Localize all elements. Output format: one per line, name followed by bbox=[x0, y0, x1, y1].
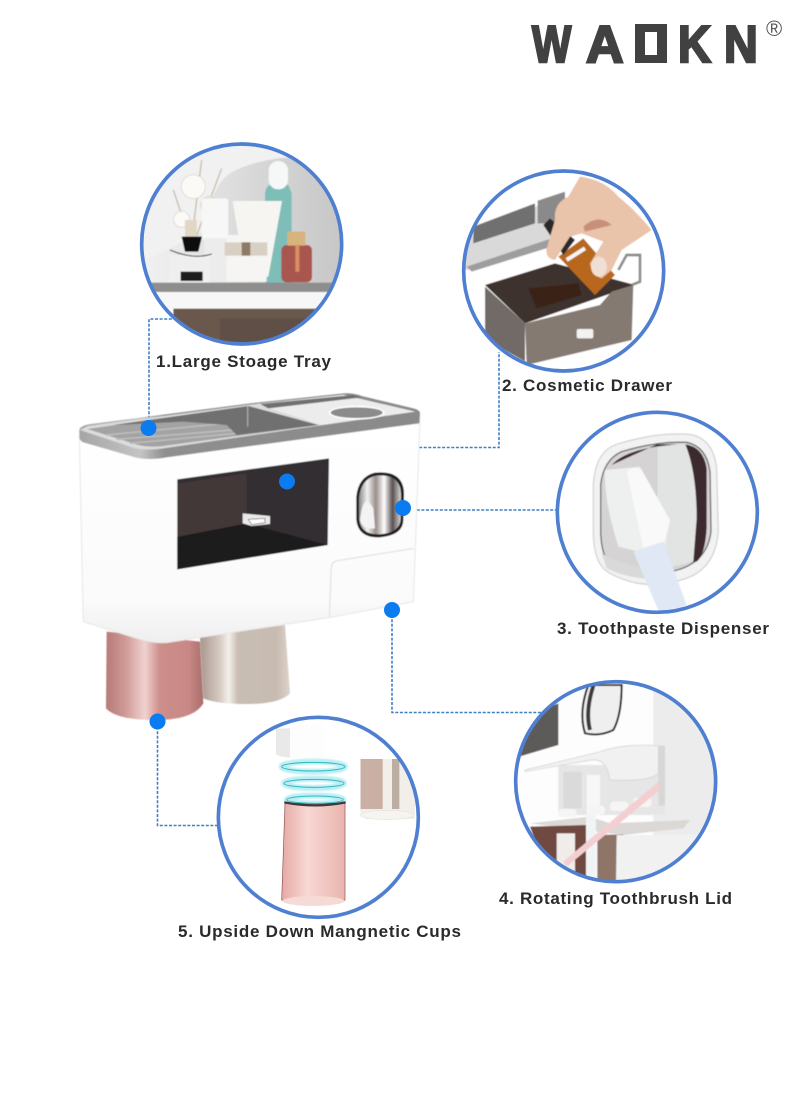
logo: WAOKN: O bbox=[638, 20, 662, 71]
cream tube bbox=[233, 201, 282, 277]
brush holder pegs bbox=[558, 798, 652, 814]
pink cup bbox=[282, 803, 345, 903]
drawer window bbox=[177, 458, 329, 569]
label 5: 5. Upside Down Mangnetic Cups bbox=[178, 922, 461, 941]
dot markers bbox=[140, 420, 411, 730]
panel: magnetic cups circle bbox=[217, 717, 423, 923]
dispenser body bbox=[79, 420, 420, 643]
tray dark rear bbox=[113, 406, 318, 435]
dark interior bbox=[612, 444, 707, 565]
logo: WAOKN bbox=[532, 15, 782, 74]
label 1: 1.Large Stoage Tray bbox=[156, 352, 332, 371]
cream jar bbox=[227, 235, 267, 282]
pink brush bbox=[563, 782, 660, 867]
panel: large storage tray circle bbox=[140, 143, 347, 350]
right top face bbox=[257, 395, 415, 425]
logo: WAOKN: W bbox=[532, 15, 572, 73]
shelf bbox=[140, 283, 347, 292]
panel: rotating toothbrush lid circle bbox=[513, 680, 720, 887]
drawer interior bbox=[485, 263, 635, 323]
rose gold cup bbox=[106, 632, 203, 720]
mirror bbox=[582, 685, 622, 734]
magnetic rings bbox=[282, 762, 345, 804]
logo: WAOKN: A bbox=[586, 16, 624, 74]
drawer sides bbox=[485, 287, 525, 362]
lid bbox=[525, 745, 658, 780]
hand bbox=[546, 177, 652, 278]
drawer clip bbox=[243, 513, 270, 526]
toothpaste squeezer bbox=[356, 472, 404, 537]
cup hole bbox=[329, 406, 385, 420]
label 3: 3. Toothpaste Dispenser bbox=[557, 619, 769, 638]
lower door bbox=[329, 548, 413, 617]
holder bbox=[276, 728, 290, 758]
amber bottle bbox=[558, 238, 615, 295]
chrome frame bbox=[593, 434, 718, 584]
lower tray bbox=[602, 554, 644, 578]
logo: WAOKN: K bbox=[678, 16, 711, 74]
champagne cup bbox=[200, 625, 290, 704]
main product: wall-mounted dispenser bbox=[79, 393, 420, 720]
panel: cosmetic drawer circle bbox=[462, 170, 668, 377]
diffuser sticks bbox=[173, 160, 222, 240]
storage tray bbox=[87, 406, 318, 447]
stored bottle bbox=[528, 283, 582, 308]
top rail bbox=[79, 393, 420, 459]
diffuser jar bbox=[190, 256, 204, 282]
logo: WAOKN: N bbox=[724, 16, 758, 74]
white bottle bbox=[202, 198, 228, 240]
serum bottle bbox=[281, 245, 312, 282]
connector lines bbox=[149, 319, 556, 826]
diffuser flowers bbox=[174, 175, 218, 227]
tray stripes bbox=[107, 423, 237, 443]
label 4: 4. Rotating Toothbrush Lid bbox=[499, 889, 732, 908]
upper shelves bbox=[466, 206, 551, 270]
champagne cup bbox=[360, 759, 415, 819]
lower shelf bbox=[530, 817, 690, 835]
drawer edge bbox=[520, 703, 559, 757]
brush bay bbox=[558, 765, 665, 815]
toothbrush head bbox=[604, 466, 644, 551]
toothbrush handle bbox=[633, 542, 687, 618]
logo: WAOKN: ® bbox=[766, 16, 782, 41]
cups below bbox=[530, 824, 587, 876]
top surface bbox=[80, 395, 415, 449]
chrome handle bbox=[618, 255, 640, 285]
teal bottle bbox=[265, 185, 292, 283]
top slot bbox=[260, 395, 362, 408]
nozzle bbox=[657, 443, 697, 568]
label 2: 2. Cosmetic Drawer bbox=[502, 376, 672, 395]
panel: toothpaste dispenser circle bbox=[557, 412, 763, 618]
white brush bbox=[586, 815, 596, 878]
